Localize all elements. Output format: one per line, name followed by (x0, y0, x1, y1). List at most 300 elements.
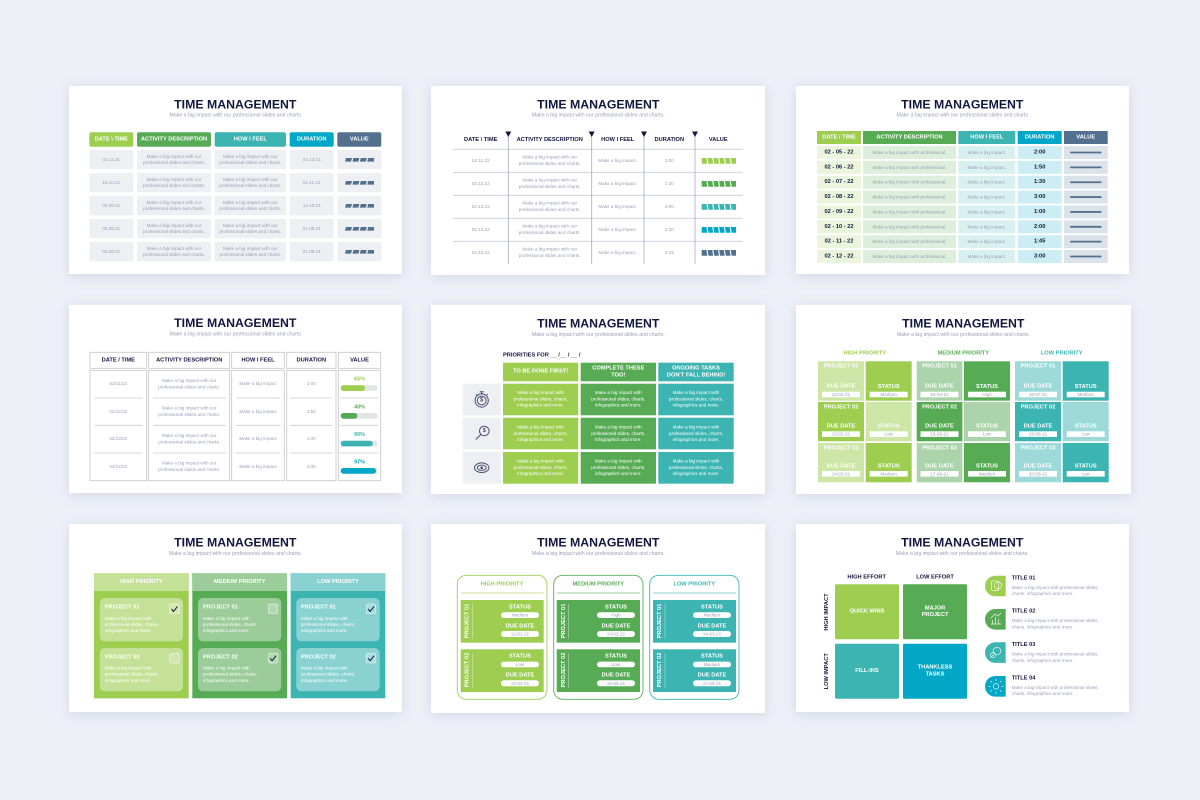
matrix row 1: Make a big impact with (517, 390, 564, 395)
panel: slide 4 outlined table with progress bars (69, 305, 402, 493)
table row 2: professional slides and charts. (143, 183, 205, 188)
list item: title 04: charts, infographics and more. (1012, 691, 1073, 696)
table row 2: Make a big impact with our (223, 177, 278, 182)
table row 2 (109, 404, 378, 419)
list item: title 01 (985, 575, 1099, 596)
heading: slide 8 title: TIME MANAGEMENT (537, 536, 660, 550)
card: high priority: DUE DATE (506, 673, 535, 679)
table header labels: DATE \ TIME (464, 137, 498, 143)
matrix axis labels: LOW EFFORT (916, 575, 954, 581)
card: high priority: DUE DATE (506, 623, 535, 629)
matrix header row: TOO! (611, 372, 625, 378)
matrix row 3: professional slides, charts, (591, 465, 645, 470)
matrix row 3 (463, 452, 734, 484)
column: medium priority: High (982, 392, 992, 397)
table frame and header: DATE / TIME (102, 357, 135, 363)
matrix quadrant: thankless tasks (903, 644, 967, 699)
matrix quadrant: major project: PROJECT (922, 612, 949, 618)
column: medium priority: PROJECT 02 (922, 405, 957, 411)
card: low priority: PROJECT 02 (657, 653, 663, 687)
column: medium priority: STATUS (976, 384, 998, 390)
table frame and header: VALUE (350, 357, 369, 363)
card: medium priority: STATUS (605, 604, 627, 610)
table row 02-06-22 (817, 161, 1108, 174)
table row 2 (472, 178, 736, 189)
table header row (89, 132, 381, 147)
table header labels (464, 137, 728, 143)
table row 1 (110, 377, 378, 391)
column: low priority: LOW PRIORITY (1041, 351, 1083, 357)
table row 3: Make a big impact. (598, 204, 637, 209)
matrix row 1: professional slides, charts, (591, 396, 645, 402)
icons: column marker triangles (505, 132, 698, 137)
column: low priority: 20-09-21 (1029, 471, 1048, 476)
card: low priority: STATUS (701, 604, 723, 610)
column: low priority: STATUS (1075, 384, 1097, 390)
table row 02-08-22: 3:00 (1034, 194, 1045, 200)
card: low priority: 14-03-21 (703, 632, 722, 636)
table row 3: 02.13.22 (472, 204, 490, 209)
matrix row 3: infographics and more. (595, 471, 642, 476)
panel: slide 7 priority checklists (69, 524, 402, 712)
card: high priority: HIGH PRIORITY (481, 582, 524, 588)
icon: eye (474, 463, 489, 473)
matrix row 2: Make a big impact with (517, 424, 564, 430)
table row 2: 15.10.21 (102, 180, 121, 185)
table row 02-06-22: 02 - 06 - 22 (824, 164, 854, 170)
card: high priority: STATUS (509, 604, 531, 610)
list item: title 04: TITLE 04 (1012, 675, 1036, 681)
card: low priority: LOW PRIORITY (673, 582, 715, 588)
list item: title 03: charts, infographics and more. (1012, 658, 1073, 663)
column: high priority: 14-03-21 (832, 471, 851, 476)
matrix row 2: infographics and more. (517, 437, 564, 442)
table row 3: Make a big impact with our (522, 200, 577, 206)
column: low priority: Low (1081, 471, 1091, 476)
column: medium priority: Low (983, 432, 992, 437)
table row 4: Make a big impact with our (147, 223, 202, 228)
column: low priority: DUE DATE (1024, 424, 1053, 430)
column: high priority: DUE DATE (827, 384, 856, 390)
column: low priority: PROJECT 01 (1021, 364, 1055, 370)
column: high priority: PROJECT 01 (824, 364, 858, 370)
table row 4 (89, 219, 381, 238)
column: high priority: DUE DATE (827, 424, 856, 430)
table row 1: 04.12.21 (303, 157, 321, 162)
column: high priority: Low (884, 432, 894, 437)
list item: title 03: TITLE 03 (1012, 642, 1035, 648)
matrix row 3: infographics and more. (517, 471, 564, 476)
column: medium priority: professional slides, charts, (203, 622, 257, 627)
table row 2: Make a big impact with our (162, 406, 217, 411)
card: medium priority: High (611, 613, 621, 618)
icon: checked box (366, 653, 376, 663)
card: low priority: STATUS (701, 654, 723, 660)
column: medium priority: infographics and more. (203, 628, 250, 633)
table row 02-10-22: Make a big impact with professional. (872, 224, 947, 229)
table row 4: professional slides and charts. (519, 230, 581, 235)
table row 1: Make a big impact with our (147, 154, 202, 159)
table row 5: Make a big impact. (598, 250, 637, 255)
column: medium priority: PROJECT 01 (203, 605, 238, 611)
table row 02-10-22: 2:00 (1034, 224, 1045, 230)
table row 02-07-22: 02 - 07 - 22 (824, 179, 854, 185)
table row 3: professional slides and charts. (219, 206, 281, 211)
column: high priority: STATUS (878, 384, 900, 390)
icon: checked box (366, 604, 376, 614)
card: high priority: Low (516, 662, 525, 667)
column: high priority: infographics and more. (105, 628, 151, 633)
table row 3: 14.10.21 (303, 203, 321, 208)
card: high priority: Medium (512, 613, 528, 618)
table row 4: Make a big impact. (598, 227, 637, 232)
table row 4: professional slides and charts. (143, 229, 205, 234)
table header row: ACTIVITY DESCRIPTION (876, 134, 943, 140)
matrix row 1: infographics and more. (595, 402, 642, 408)
card: low priority: 17-06-21 (703, 681, 722, 686)
matrix row 1: Make a big impact with (673, 390, 720, 395)
card: high priority: PROJECT 02 (465, 653, 471, 687)
column: low priority: STATUS (1075, 463, 1097, 469)
table row 02-07-22: Make a big impact with professional. (872, 180, 947, 185)
table row 02-08-22: Make a big impact. (968, 195, 1006, 200)
column: medium priority: Medium (979, 471, 995, 476)
column: high priority: Make a big impact with (105, 666, 152, 670)
table row 4: Make a big impact with our (223, 223, 278, 228)
panel: slide 8 priority cards (431, 524, 765, 713)
matrix row 1: infographics and more. (517, 402, 564, 408)
card: medium priority (554, 575, 643, 699)
card: medium priority: DUE DATE (602, 623, 631, 629)
matrix row 1: infographics and more. (673, 402, 719, 408)
table row 2: professional slides and charts. (158, 412, 220, 417)
column: low priority (1015, 351, 1109, 482)
table row 02-08-22: Make a big impact with professional. (872, 195, 947, 200)
matrix row 2 (463, 418, 734, 449)
table header row: HOW I FEEL (234, 136, 267, 142)
table row 02-11-22: Make a big impact with professional. (872, 239, 947, 244)
column: medium priority: DUE DATE (925, 424, 954, 430)
heading: slide 4 title: TIME MANAGEMENT (174, 316, 297, 330)
card: medium priority: MEDIUM PRIORITY (573, 582, 624, 588)
card: medium priority: DUE DATE (602, 673, 631, 679)
table row 2: Make a big impact. (598, 181, 637, 186)
table row 4 (109, 459, 378, 474)
table row 2: Make a big impact with our (522, 178, 577, 182)
table row 2: professional slides and charts. (219, 183, 281, 188)
table row 02-09-22 (817, 205, 1108, 218)
table header row: ACTIVITY DESCRIPTION (141, 136, 207, 142)
column: high priority: PROJECT 03 (824, 446, 858, 452)
matrix axis labels: HIGH IMPACT (824, 593, 830, 631)
column: low priority: STATUS (1075, 424, 1097, 430)
matrix quadrant: fill-ins: FILL-INS (855, 668, 879, 674)
table header row: DURATION (1025, 134, 1054, 140)
table row 02-10-22: Make a big impact. (968, 224, 1006, 229)
column: low priority: Low (1081, 432, 1091, 437)
table header row: VALUE (1076, 134, 1095, 140)
icon: stopwatch: $ (480, 398, 484, 404)
column: low priority: 18-07-21 (1029, 392, 1048, 397)
column: medium priority: 17-06-21 (930, 471, 949, 476)
table row 02-11-22 (817, 235, 1108, 248)
matrix header row: TO BE DONE FIRST! (513, 369, 568, 375)
table frame and header: ACTIVITY DESCRIPTION (156, 357, 222, 363)
table row 2 (89, 173, 381, 192)
table frame and header: DURATION (297, 357, 326, 363)
table header labels: VALUE (709, 137, 728, 143)
column: medium priority: DUE DATE (925, 463, 954, 469)
column: medium priority: Make a big impact with (203, 616, 250, 621)
table row 02-05-22: 02 - 05 - 22 (824, 150, 854, 156)
list item: title 02: charts, infographics and more. (1012, 624, 1073, 630)
panel: slide 9 effort impact matrix (796, 524, 1129, 712)
table row 5: professional slides and charts. (519, 253, 581, 258)
column: high priority: PROJECT 02 (824, 405, 858, 411)
card: low priority: Medium (704, 662, 720, 667)
matrix quadrant: thankless tasks: THANKLESS (918, 665, 953, 671)
table header row (817, 131, 1108, 144)
table row 02-06-22: 1:50 (1034, 164, 1045, 170)
table row 3: professional slides and charts. (143, 206, 205, 211)
table row 2: 01.11.21 (303, 180, 321, 185)
table row 4: 02/14/22 (109, 464, 128, 469)
heading: slide 7 title: TIME MANAGEMENT (174, 536, 297, 550)
column: medium priority: 16-05-21 (930, 432, 949, 437)
table row 1: Make a big impact with our (522, 154, 577, 160)
table row 5: 01.09.21 (303, 249, 321, 254)
matrix row 1: professional slides, charts, (514, 396, 568, 402)
card: medium priority: STATUS (605, 654, 627, 660)
column: low priority: professional slides, charts, (301, 672, 355, 676)
column: medium priority: Make a big impact with (203, 666, 250, 670)
table row 1 (472, 154, 736, 166)
card: medium priority: PROJECT 01 (561, 604, 567, 638)
table row 02-07-22: Make a big impact. (968, 180, 1006, 185)
table row 3: 3:00 (665, 204, 674, 209)
column: medium priority: PROJECT 03 (922, 446, 957, 452)
matrix row 2: professional slides, charts, (514, 431, 568, 436)
matrix quadrant: thankless tasks: TASKS (926, 671, 945, 677)
column: low priority: DUE DATE (1024, 384, 1053, 390)
table row 3 (472, 200, 736, 212)
column: high priority: HIGH PRIORITY (120, 579, 163, 585)
table row 1: Make a big impact with our (223, 154, 278, 159)
table frame and header (90, 352, 381, 481)
matrix quadrant: major project (903, 584, 967, 639)
table row 5 (89, 242, 381, 261)
table row 4: 02.14.22 (472, 227, 490, 232)
matrix row 2: infographics and more. (595, 437, 642, 442)
column: low priority: infographics and more. (301, 678, 348, 683)
text: slide 7 subtitle: Make a big impact with our professional slides and charts. (169, 551, 302, 557)
table row 1: professional slides and charts. (158, 384, 220, 389)
column: high priority (818, 351, 912, 482)
heading: slide 1 title: TIME MANAGEMENT (174, 97, 297, 111)
column: low priority: PROJECT 02 (1021, 405, 1055, 411)
column: low priority (291, 573, 385, 698)
table row 5 (472, 246, 736, 258)
column: high priority: Medium (881, 471, 897, 476)
table row 02-07-22 (817, 176, 1108, 189)
icon: magnifier with dollar: $ (483, 428, 486, 434)
matrix row 2: professional slides, charts, (669, 431, 723, 436)
heading: slide 2 title: TIME MANAGEMENT (537, 97, 660, 111)
list item: title 04: Make a big impact with professional slides, (1012, 685, 1099, 690)
panel: slide 2 lined table (431, 86, 765, 275)
icon: documents (992, 581, 1002, 590)
table row 1: professional slides and charts. (519, 161, 581, 166)
table row 02-12-22: Make a big impact. (968, 254, 1006, 259)
table row 5: 02.15.22 (472, 250, 490, 255)
table header row: HOW I FEEL (970, 134, 1004, 140)
table row 02-12-22: 02 - 12 - 22 (824, 254, 854, 260)
matrix row 2: Make a big impact with (673, 424, 720, 430)
table row 1: 02.11.22 (472, 158, 490, 163)
card: high priority (457, 575, 547, 699)
card: high priority: 12-01-21 (511, 632, 530, 636)
table row 02-10-22 (817, 220, 1108, 233)
table row 4 (472, 224, 736, 235)
table row 1: professional slides and charts. (219, 160, 281, 165)
table row 02-06-22: Make a big impact. (968, 165, 1006, 170)
table row 1: Make a big impact (239, 381, 277, 386)
table header labels: HOW I FEEL (601, 137, 635, 143)
text: slide 1 subtitle: Make a big impact with our professional slides and charts (170, 113, 301, 119)
matrix header row: DON'T FALL BEHIND! (667, 372, 725, 378)
card: low priority: Medium (704, 613, 720, 618)
table frame and header: HOW I FEEL (241, 357, 275, 363)
matrix row 3: infographics and more. (673, 471, 719, 476)
matrix axis labels: LOW IMPACT (824, 653, 830, 689)
table row 2: 40% (354, 404, 365, 410)
table row 02-12-22: 3:00 (1034, 254, 1045, 260)
table row 2: Make a big impact with our (147, 177, 202, 182)
text: slide 8 subtitle: Make a big impact with our professional slides and charts. (532, 551, 665, 557)
table row 4: 01.09.21 (303, 226, 321, 231)
matrix quadrant: fill-ins (835, 644, 899, 699)
icon: checked box (268, 653, 278, 663)
table row 3: 90% (354, 432, 365, 438)
list item: title 02: Make a big impact with professional slides, (1012, 618, 1099, 623)
column: high priority (94, 573, 189, 698)
matrix quadrant: quick wins: QUICK WINS (850, 609, 885, 615)
column: low priority: DUE DATE (1024, 463, 1053, 469)
list item: title 04 (985, 675, 1099, 697)
table row 02-05-22: 2:00 (1034, 150, 1045, 156)
icon: chart (991, 613, 1001, 624)
column: medium priority: infographics and more. (203, 678, 250, 683)
text: slide 5 subtitle: Make a big impact with our professional slides and charts. (532, 332, 665, 338)
heading: slide 6 title: TIME MANAGEMENT (902, 317, 1025, 331)
table row 3 (89, 196, 381, 215)
matrix header row: ONGOING TASKS (672, 366, 720, 372)
card: low priority: DUE DATE (698, 673, 727, 679)
matrix row 3: Make a big impact with (517, 458, 564, 464)
table row 5: Make a big impact with our (223, 246, 278, 251)
column: high priority: PROJECT 02 (105, 654, 139, 660)
table header row: VALUE (350, 136, 369, 142)
matrix row 3: Make a big impact with (673, 458, 720, 464)
table row 2: 3:50 (307, 409, 316, 414)
panel: slide 5 priorities matrix (431, 305, 765, 494)
card: high priority: PROJECT 01 (465, 604, 471, 638)
table row 2: professional slides and charts. (519, 184, 581, 189)
text: slide 3 subtitle: Make a big impact with our professional slides and charts (897, 113, 1028, 119)
table row 4: 97% (354, 459, 365, 465)
column: medium priority (917, 351, 1010, 482)
column: medium priority: professional slides, charts, (203, 672, 257, 676)
table row 3: Make a big impact (239, 436, 277, 441)
text: slide 9 subtitle: Make a big impact with our professional slides and charts. (896, 551, 1029, 557)
table header labels: ACTIVITY DESCRIPTION (517, 137, 583, 143)
table row 02-07-22: 1:30 (1034, 179, 1045, 185)
table row 02-11-22: 02 - 11 - 22 (825, 239, 853, 245)
table row 02-09-22: Make a big impact with professional. (872, 209, 947, 214)
list item: title 03: Make a big impact with professional slides, (1012, 652, 1099, 656)
column: high priority: 12-01-21 (832, 392, 851, 397)
column: high priority: professional slides, charts, (105, 622, 159, 627)
table row 5: Make a big impact with our (147, 246, 202, 251)
table row 4: 2:30 (665, 227, 674, 232)
table row 2: 02.12.22 (472, 181, 490, 186)
column: low priority: PROJECT 02 (301, 654, 336, 660)
table row 02-05-22: Make a big impact. (968, 150, 1006, 155)
card: high priority: 15-04-21 (511, 681, 530, 686)
table row 02-08-22 (817, 191, 1108, 204)
heading: slide 9 title: TIME MANAGEMENT (901, 536, 1024, 550)
table row 02-11-22: 1:45 (1034, 239, 1045, 245)
column: medium priority: PROJECT 02 (203, 654, 238, 660)
column: high priority: PROJECT 01 (105, 605, 139, 611)
column: low priority: Make a big impact with (301, 666, 348, 670)
table header labels: DURATION (655, 137, 684, 143)
table row 02-09-22: Make a big impact. (968, 209, 1006, 214)
table header row: DATE \ TIME (95, 136, 128, 142)
table row 5: professional slides and charts. (219, 252, 281, 257)
column: medium priority: MEDIUM PRIORITY (938, 351, 989, 357)
column: low priority: PROJECT 01 (301, 605, 336, 611)
text: priorities label: PRIORITIES FOR __ /__ / __ / (503, 352, 581, 358)
matrix row 2: infographics and more. (673, 437, 719, 442)
column: high priority: Medium (881, 392, 897, 397)
table row 1: 2:00 (307, 381, 316, 386)
table row 1 (89, 150, 381, 169)
column: high priority: Make a big impact with (105, 616, 152, 621)
table row 3: professional slides and charts. (519, 207, 581, 212)
text: slide 6 subtitle: Make a big impact with our professional slides and charts. (897, 332, 1030, 338)
table row 2: 02/12/22 (109, 409, 128, 414)
list item: title 01: TITLE 01 (1012, 575, 1035, 581)
table row 02-10-22: 02 - 10 - 22 (824, 224, 854, 230)
table row 02-05-22: Make a big impact with professional. (872, 150, 947, 155)
card: medium priority: 16-05-21 (607, 681, 626, 686)
icon: magnifier (990, 647, 1001, 658)
matrix row 3: Make a big impact with (595, 458, 642, 464)
table row 02-12-22: Make a big impact with professional. (872, 254, 947, 259)
table header row: DATE / TIME (822, 134, 856, 140)
column: medium priority: MEDIUM PRIORITY (214, 579, 266, 585)
table row 3: Make a big impact with our (223, 200, 278, 205)
icon: sun gear (988, 679, 1004, 694)
table row 02-05-22 (817, 146, 1108, 159)
table row 5: 3:15 (665, 250, 674, 255)
column: medium priority: STATUS (976, 424, 998, 430)
panel: slide 6 priority project grid (796, 305, 1131, 494)
table row 5: 03.08.21 (102, 249, 121, 254)
heading: slide 5 title: TIME MANAGEMENT (537, 317, 660, 331)
matrix row 1: professional slides, charts, (669, 396, 723, 402)
